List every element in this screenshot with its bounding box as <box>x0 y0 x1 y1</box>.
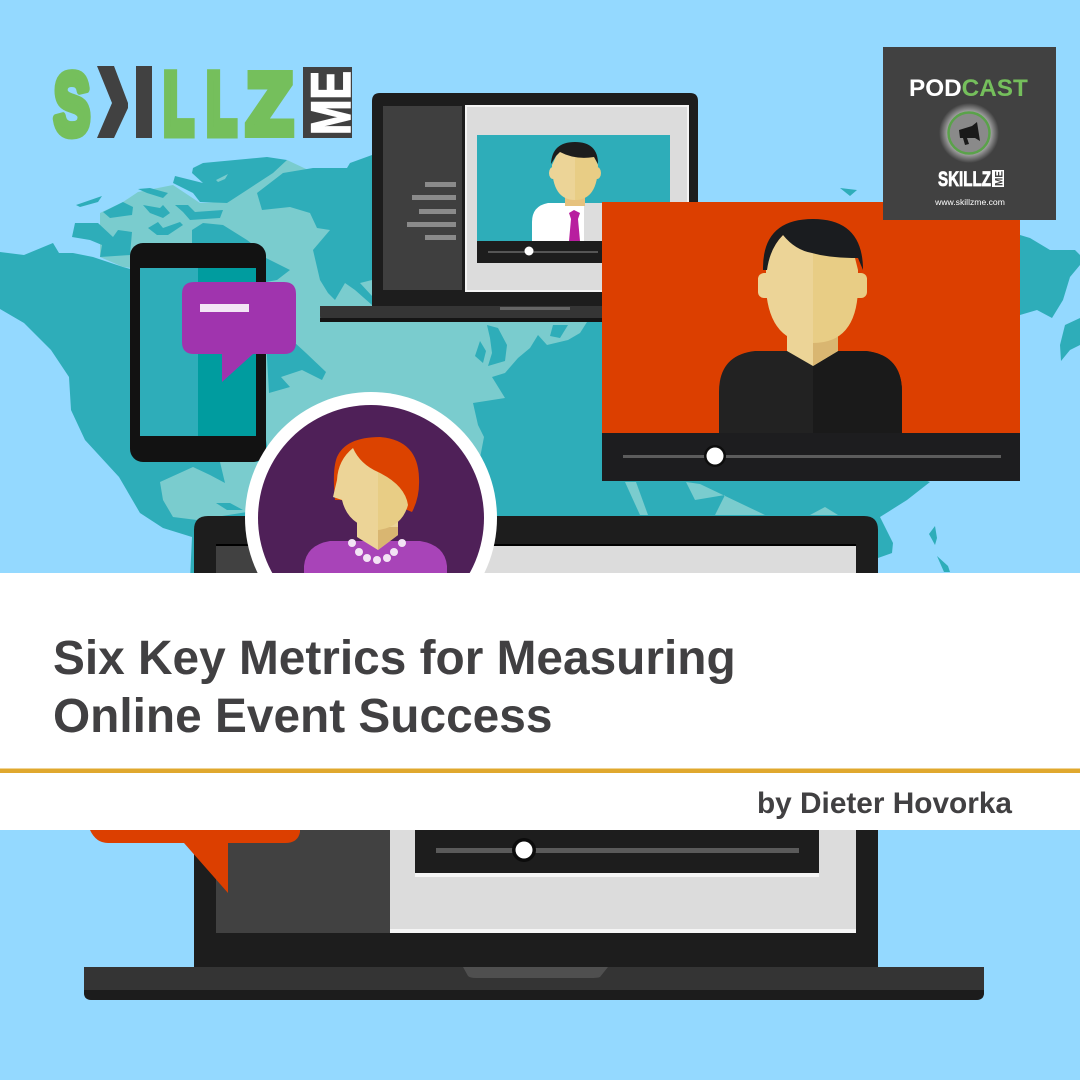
phone <box>130 243 296 462</box>
woman hair <box>334 437 419 512</box>
logo letter Z: Z <box>247 57 292 151</box>
title: Six Key Metrics for Measuring <box>53 632 736 685</box>
gulf blob <box>160 462 260 520</box>
laptop base <box>320 306 640 322</box>
gold divider <box>0 768 1080 773</box>
east coast lakes <box>487 325 507 366</box>
title: Online Event Success <box>53 690 552 743</box>
bottom laptop sidebar <box>216 546 390 933</box>
red speech bubble <box>90 820 300 893</box>
podcast badge <box>883 47 1056 220</box>
white title band <box>0 573 1080 830</box>
author byline: by Dieter Hovorka <box>757 787 1012 820</box>
logo ME badge: ME <box>299 71 362 135</box>
world map background <box>0 155 1080 580</box>
man in white shirt <box>532 142 606 241</box>
laptop keyboard base <box>84 967 984 1000</box>
woman avatar <box>245 392 497 644</box>
woman neck <box>357 515 398 550</box>
bottom laptop slider <box>436 838 799 862</box>
phone screen <box>140 268 256 436</box>
top laptop with video call <box>320 93 698 322</box>
logo letter I <box>136 66 152 138</box>
woman body <box>304 541 447 580</box>
website url: www.skillzme.com <box>934 197 1005 207</box>
logo letter L: L <box>207 57 236 151</box>
pearl necklace <box>348 539 406 564</box>
laptop screen panel <box>466 106 688 291</box>
bottom laptop <box>84 516 984 1000</box>
bottom laptop screen panel <box>390 546 856 933</box>
video frame <box>477 135 670 241</box>
man in black <box>719 219 902 434</box>
small skillz logo: ME <box>994 171 1006 186</box>
small skillz logo: SKILLZ <box>938 168 991 191</box>
video controls <box>477 241 670 263</box>
video control bar <box>602 433 1020 481</box>
purple chat bubble <box>182 282 296 382</box>
megaphone icon <box>939 103 999 163</box>
logo chevron <box>97 66 128 138</box>
sidebar with text lines <box>383 106 462 290</box>
red video window <box>602 202 1020 481</box>
podcast label: PODCAST <box>909 75 1028 102</box>
woman face <box>333 448 408 530</box>
logo: SKILLZ ME <box>54 57 362 153</box>
logo letter L: L <box>164 57 193 151</box>
canadian mainland <box>257 155 372 305</box>
logo letter S: S <box>54 57 90 153</box>
